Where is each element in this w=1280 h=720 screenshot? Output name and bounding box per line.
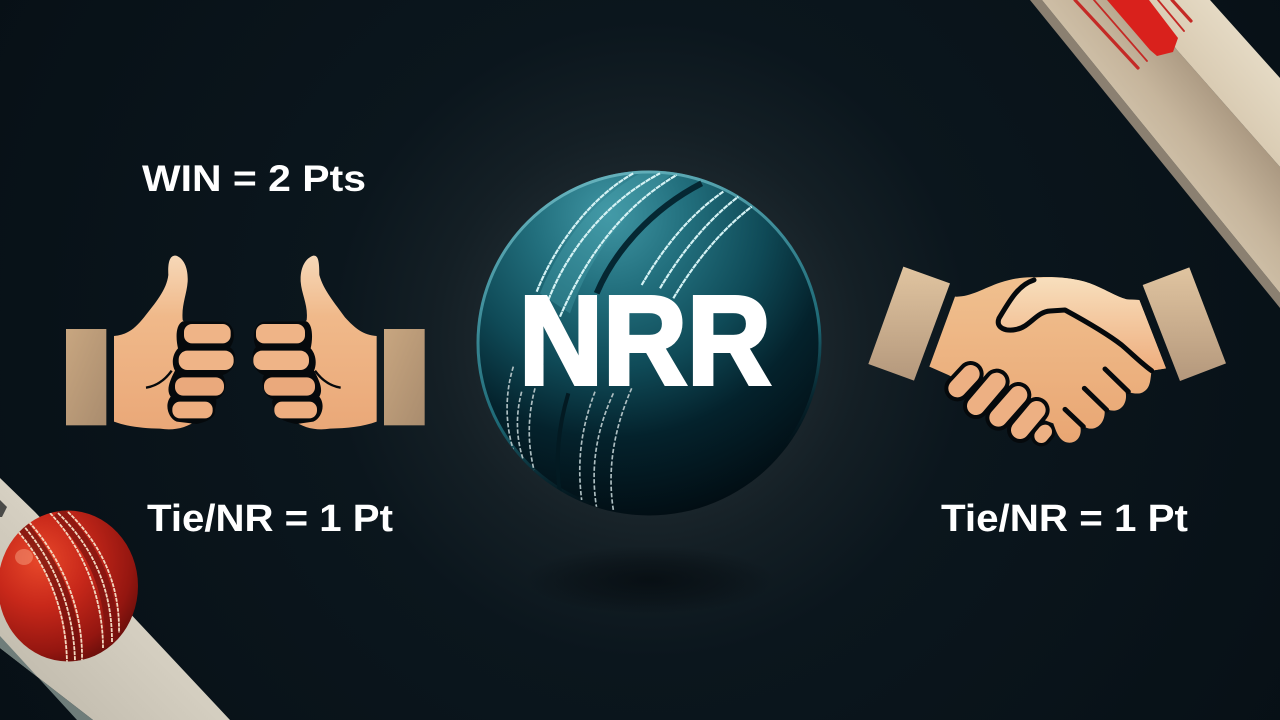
left hand — [114, 256, 235, 429]
grip stripes — [1075, 0, 1191, 68]
ball seam and stitches — [507, 173, 752, 510]
ball highlight — [15, 549, 33, 565]
red cricket ball — [0, 510, 138, 663]
left cuff — [66, 329, 106, 425]
text: Tie/NR right: Tie/NR = 1 Pt — [941, 498, 1188, 540]
icon: handshake — [868, 267, 1226, 443]
ball body — [476, 170, 822, 516]
ball shadow — [525, 546, 775, 614]
NRR label: NRR — [519, 270, 771, 411]
thumb outline — [998, 280, 1152, 371]
red grip — [1107, 0, 1178, 56]
heading: WIN = 2 Pts: WIN = 2 Pts — [142, 158, 366, 199]
cricket bat: bottom left — [0, 478, 230, 720]
text: Tie/NR left: Tie/NR = 1 Pt — [147, 498, 393, 540]
ball rim — [478, 172, 820, 514]
central NRR ball — [476, 170, 822, 516]
right cuff — [384, 329, 425, 425]
right cuff — [1143, 267, 1226, 381]
finger separators — [1065, 369, 1128, 427]
right hand — [253, 256, 377, 429]
clasped hands — [929, 277, 1166, 443]
left fingers — [957, 374, 1045, 436]
icon: two thumbs up — [66, 256, 425, 429]
cricket bat: top right — [1030, 0, 1280, 308]
left cuff — [868, 267, 950, 381]
ball seam — [15, 512, 119, 663]
